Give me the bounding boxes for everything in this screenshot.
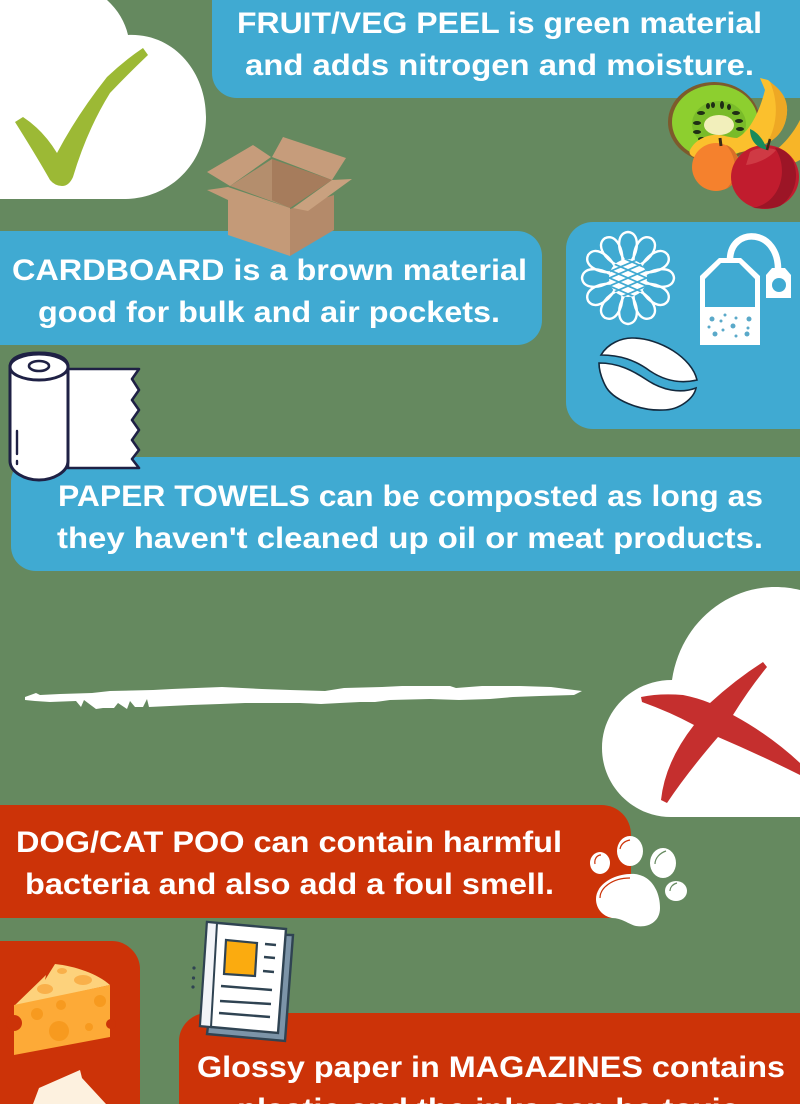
panel: paper towels bbox=[11, 457, 800, 571]
panel: dog and cat poo bbox=[0, 805, 631, 918]
icon: green check mark bbox=[15, 48, 148, 186]
panel: fruit and veg peel: and adds nitrogen and moisture. bbox=[245, 49, 754, 82]
panel: cardboard: good for bulk and air pockets. bbox=[38, 296, 500, 329]
panel: magazines bbox=[179, 1013, 800, 1104]
panel: fruit and veg peel: FRUIT/VEG PEEL is green material bbox=[237, 7, 762, 40]
panel: dog and cat poo: bacteria and also add a foul smell. bbox=[25, 868, 554, 901]
icon: red cross bbox=[641, 662, 800, 803]
icon: fruit group bbox=[668, 78, 800, 209]
panel: cardboard: CARDBOARD is a brown material bbox=[12, 254, 527, 287]
cloud with red cross bbox=[602, 587, 800, 817]
icon: magazine bbox=[191, 922, 293, 1041]
panel: dog and cat poo: DOG/CAT POO can contain harmful bbox=[16, 826, 562, 859]
panel: fruit and veg peel bbox=[212, 0, 800, 98]
icon: flower bbox=[582, 232, 674, 324]
panel: dairy bbox=[0, 941, 140, 1104]
panel: paper towels: they haven't cleaned up oil or meat products. bbox=[57, 522, 763, 555]
icon: paw print bbox=[590, 836, 687, 926]
brush stroke bbox=[25, 686, 582, 709]
icon: tea bag bbox=[700, 236, 791, 345]
icon: paper towel roll bbox=[10, 353, 139, 480]
panel: paper towels: PAPER TOWELS can be composted as long as bbox=[58, 480, 763, 513]
panel: magazines: Glossy paper in MAGAZINES contains bbox=[197, 1051, 785, 1084]
icon: milk carton bbox=[33, 1070, 106, 1104]
panel: blue icons bbox=[566, 222, 800, 429]
cloud with check mark bbox=[0, 0, 206, 199]
icon: cheese bbox=[6, 964, 116, 1055]
icon: coffee bean bbox=[599, 338, 697, 410]
icon: cardboard box bbox=[207, 137, 352, 256]
panel: cardboard bbox=[0, 231, 542, 345]
